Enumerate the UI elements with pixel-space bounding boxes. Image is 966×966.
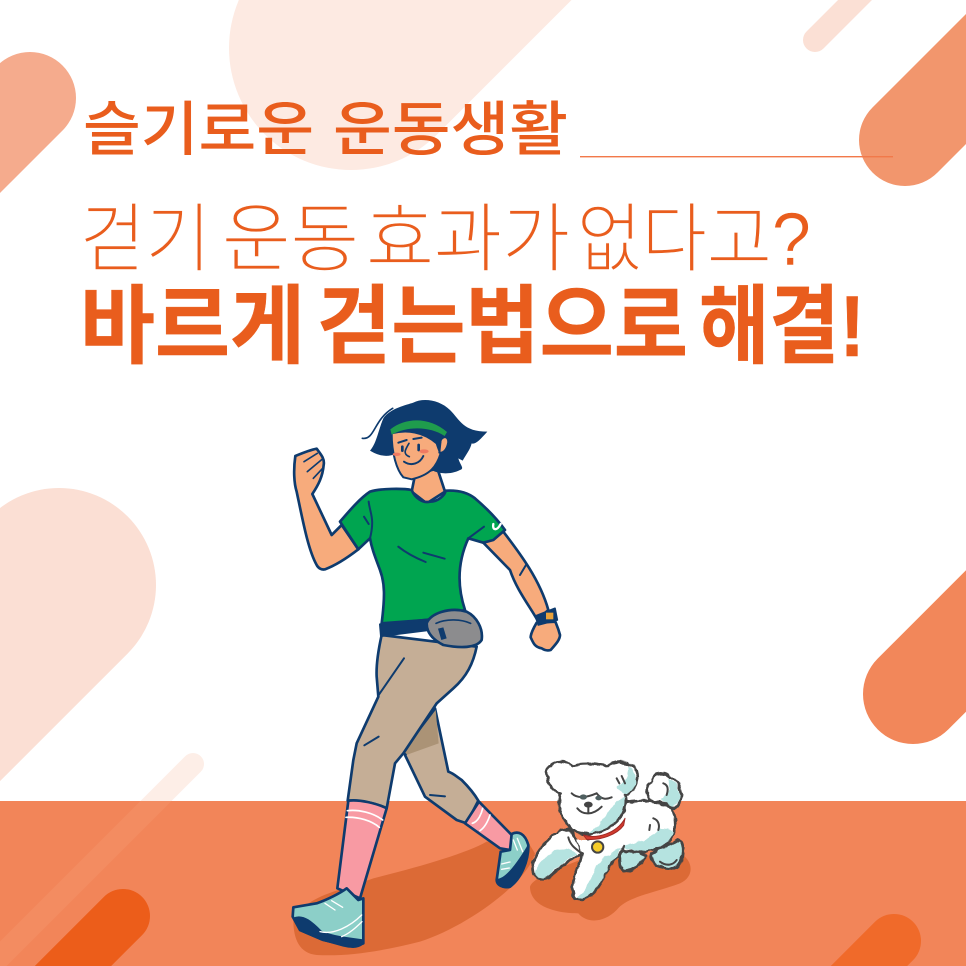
ear — [439, 437, 448, 453]
hair — [370, 400, 487, 473]
fist lines — [304, 453, 323, 478]
heading: series title — [83, 97, 568, 163]
dog body — [587, 801, 675, 852]
dog tag — [592, 841, 603, 853]
arm: swinging — [483, 532, 548, 620]
dog face — [568, 776, 677, 865]
back sock — [465, 802, 513, 850]
heading: series title: 운동생활 — [333, 97, 568, 163]
dog shadow — [530, 853, 691, 920]
heading: question line: 없다고? — [577, 197, 811, 281]
front shoe — [293, 888, 363, 947]
headband — [390, 420, 447, 436]
loose hair strand — [362, 408, 393, 438]
dog raised paw — [532, 829, 582, 879]
heading: answer line: 걷는법으로 — [317, 279, 688, 375]
ground — [0, 801, 966, 966]
dog — [532, 762, 683, 900]
facial features — [398, 438, 423, 464]
dog rear leg — [652, 839, 683, 869]
arm: raised — [294, 449, 358, 569]
watch — [535, 608, 557, 625]
hair under band — [427, 429, 443, 445]
face — [392, 432, 441, 479]
heading: series title: 슬기로운 — [83, 97, 314, 163]
walker shadow — [293, 840, 535, 955]
front leg — [348, 635, 477, 808]
ground decorations — [0, 764, 894, 966]
dog coat — [532, 762, 683, 900]
back leg — [404, 708, 528, 887]
neck — [412, 468, 445, 503]
title rule — [580, 156, 893, 157]
sleeve logo — [493, 524, 501, 529]
dog collar — [583, 818, 625, 840]
heading: answer line: 바르게 — [80, 279, 305, 375]
illustration: walker and dog — [293, 400, 691, 955]
waist belt — [380, 619, 429, 636]
hip line — [379, 658, 404, 695]
shirt — [340, 489, 505, 623]
heading: question line — [80, 197, 811, 281]
back shoe — [497, 833, 528, 887]
shirt folds — [364, 502, 484, 562]
thigh crease marks — [364, 737, 379, 745]
front sock — [337, 800, 387, 898]
belt bag — [427, 610, 482, 647]
heading: question line: 효과가 — [366, 197, 570, 281]
dog tail — [647, 774, 681, 808]
hand — [531, 622, 560, 650]
dog head — [547, 762, 638, 834]
heading: answer line — [80, 279, 865, 375]
blush — [393, 453, 401, 456]
heading: question line: 걷기 — [80, 197, 211, 281]
dog front leg — [573, 840, 627, 900]
dog eyes and nose — [580, 794, 602, 808]
dog middle leg — [620, 845, 646, 872]
heading: question line: 운동 — [222, 197, 359, 281]
heading: answer line: 해결! — [699, 279, 865, 375]
